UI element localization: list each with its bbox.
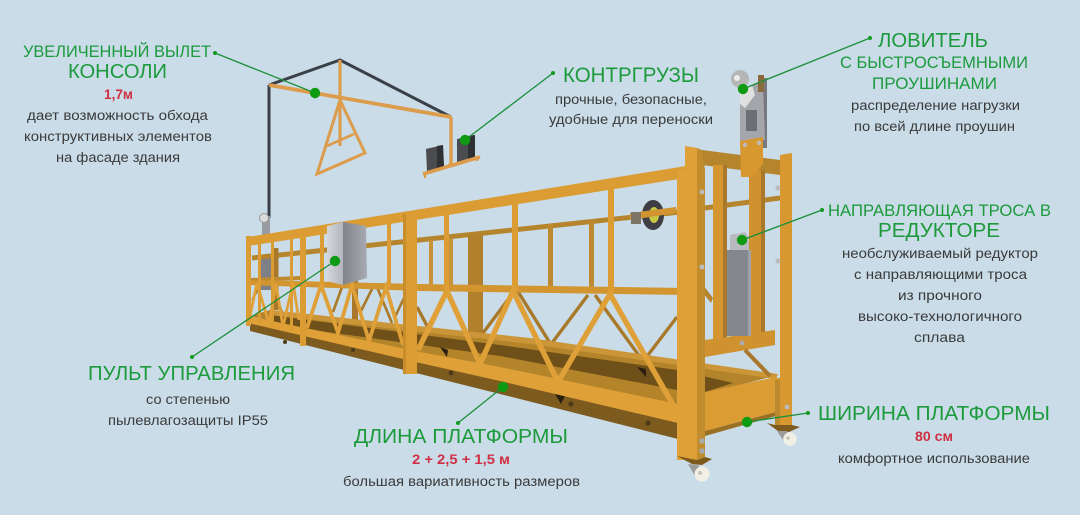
- callout: platform length: большая вариативность размеров: [343, 474, 580, 489]
- leader: counterweights: [460, 71, 555, 145]
- callout: platform width: ШИРИНА ПЛАТФОРМЫ: [818, 403, 1050, 425]
- platform floor: [250, 310, 778, 408]
- callout: counterweights: [549, 64, 713, 127]
- callout: counterweights: удобные для переноски: [549, 112, 713, 127]
- callout: platform width: 80 см: [915, 429, 953, 444]
- leader: cable guide: [737, 208, 824, 245]
- callout: cable guide: из прочного: [898, 288, 982, 303]
- leader: platform width: [742, 411, 810, 427]
- callout: counterweights: прочные, безопасные,: [555, 92, 707, 107]
- callout: console: конструктивных элементов: [24, 129, 212, 144]
- callout: control panel: ПУЛЬТ УПРАВЛЕНИЯ: [88, 363, 295, 385]
- callout: cable guide: с направляющими троса: [854, 267, 1028, 282]
- front rails: [248, 166, 686, 423]
- callout: safety lock: [840, 30, 1028, 134]
- callout: console: 1,7м: [104, 87, 133, 102]
- leader: control panel: [190, 256, 340, 359]
- callout: console: [23, 42, 212, 165]
- posts: [246, 214, 417, 374]
- callout: safety lock: распределение нагрузки: [851, 98, 1020, 113]
- leader: safety lock: [738, 36, 872, 94]
- cable guide: [727, 232, 751, 336]
- callout: cable guide: НАПРАВЛЯЮЩАЯ ТРОСА В: [828, 202, 1051, 220]
- callout: safety lock: ЛОВИТЕЛЬ: [878, 30, 988, 52]
- near end frame: [677, 146, 792, 460]
- callout: cable guide: высоко-технологичного: [858, 309, 1022, 324]
- wheels: [677, 405, 800, 482]
- front truss: [250, 283, 673, 405]
- back rails and posts: [250, 198, 780, 338]
- control panel: [327, 222, 367, 285]
- callout: platform width: [818, 403, 1050, 466]
- leader: platform length: [456, 382, 508, 425]
- callout: safety lock: по всей длине проушин: [854, 119, 1015, 134]
- safety lock: [731, 70, 767, 177]
- callout: platform length: [343, 426, 580, 489]
- callout: control panel: [88, 363, 295, 428]
- roof console: [269, 60, 451, 218]
- pulley: [630, 200, 677, 230]
- far end hoist: [260, 214, 275, 290]
- callout: counterweights: КОНТРГРУЗЫ: [563, 64, 699, 87]
- callout: console: УВЕЛИЧЕННЫЙ ВЫЛЕТ: [23, 42, 211, 61]
- callout: control panel: со степенью: [146, 392, 230, 407]
- callout: cable guide: сплава: [914, 330, 966, 345]
- callout: cable guide: РЕДУКТОРЕ: [878, 220, 1000, 242]
- callout: console: дает возможность обхода: [27, 108, 209, 123]
- counterweights: [423, 135, 480, 178]
- callout: platform length: ДЛИНА ПЛАТФОРМЫ: [354, 426, 568, 448]
- callout: platform width: комфортное использование: [838, 451, 1030, 466]
- callout: cable guide: [828, 202, 1051, 345]
- leader: console: [213, 51, 320, 98]
- leader lines and markers: [190, 36, 872, 427]
- callout: cable guide: необслуживаемый редуктор: [842, 246, 1038, 261]
- callout: control panel: пылевлагозащиты IP55: [108, 413, 268, 428]
- callout: safety lock: ПРОУШИНАМИ: [872, 74, 997, 93]
- callout: console: на фасаде здания: [56, 150, 180, 165]
- illustration: suspended platform: [246, 60, 800, 482]
- callout: safety lock: С БЫСТРОСЪЕМНЫМИ: [840, 53, 1028, 72]
- lower channel: [250, 320, 678, 439]
- callout: console: КОНСОЛИ: [68, 61, 167, 83]
- callout: platform length: 2 + 2,5 + 1,5 м: [412, 452, 510, 467]
- front uprights: [258, 188, 614, 332]
- back diagonals: [252, 283, 677, 357]
